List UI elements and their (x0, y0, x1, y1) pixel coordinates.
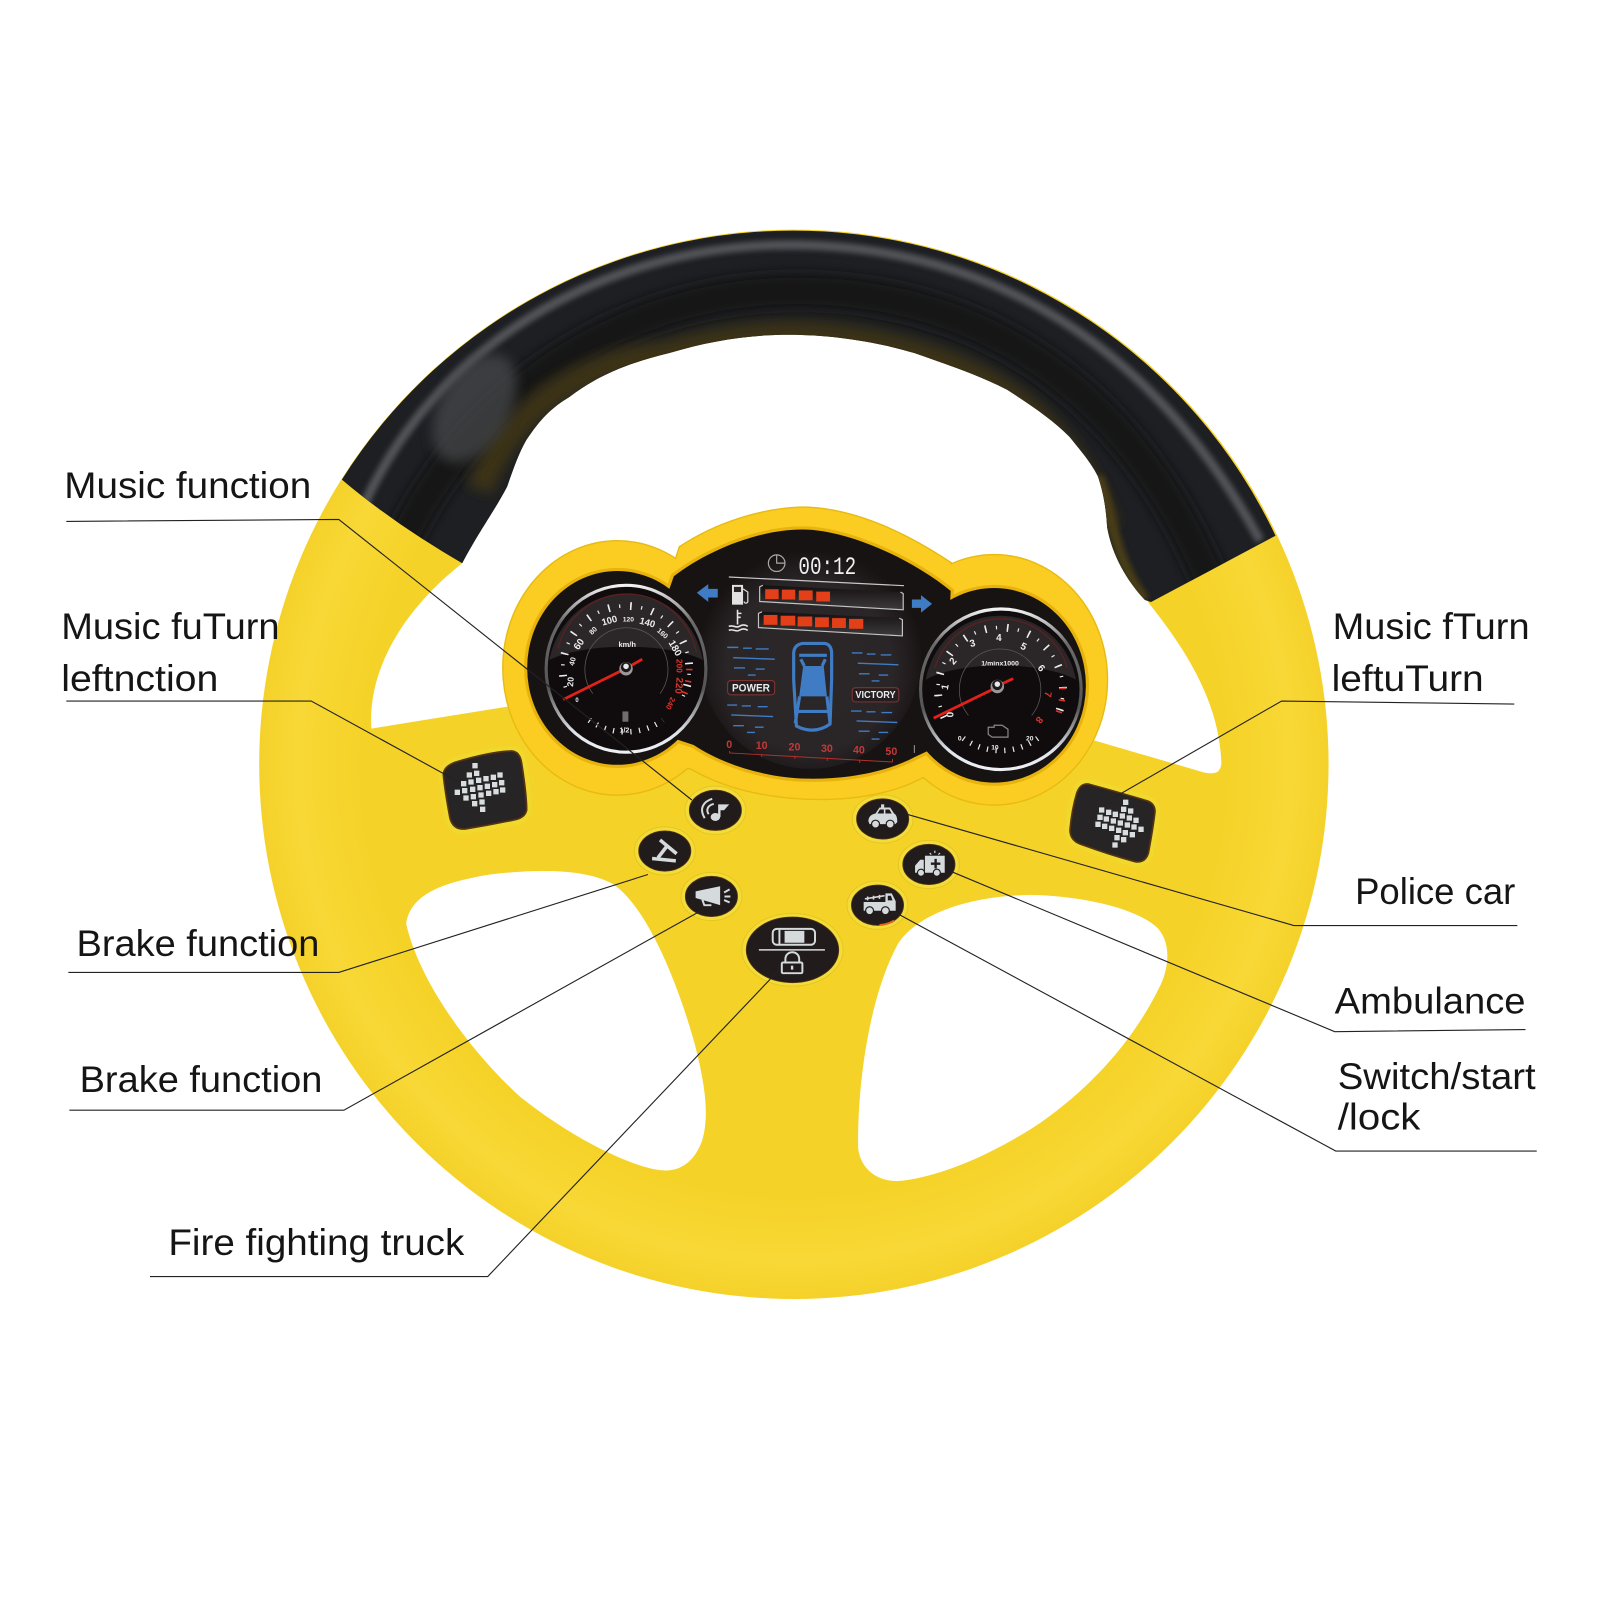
callout: Switch/start /lock: Switch/start (1338, 1056, 1536, 1097)
callout: Fire fighting truck: Fire fighting truck (168, 1222, 465, 1263)
blue car (794, 643, 832, 730)
left gauge numbers (565, 614, 685, 734)
left gauge numbers: 120 (623, 616, 634, 623)
right gauge numbers: 5 (1019, 641, 1029, 654)
divider (729, 577, 904, 586)
right gauge needle (934, 679, 1013, 718)
left speed lines (727, 647, 775, 732)
left gauge hub (619, 662, 633, 675)
grip base (342, 230, 1276, 602)
callout: Music function: Music function (64, 465, 311, 506)
left gauge numbers: 40 (567, 656, 578, 667)
left gauge numbers: 200 (675, 659, 685, 673)
POWER badge: POWER (732, 682, 770, 694)
left gauge numbers: 0 (575, 698, 579, 704)
callout: Ambulance (951, 871, 1526, 1032)
callout: Brake function lower (69, 911, 700, 1110)
temperature icon (729, 610, 748, 631)
callout: Switch/start /lock (895, 912, 1537, 1151)
right gauge numbers: 6 (1035, 663, 1047, 675)
right gauge hub (991, 680, 1004, 693)
right gauge numbers: 7 (1041, 691, 1053, 698)
left gauge numbers: 1/2 (619, 726, 629, 734)
black top grip (342, 230, 1276, 602)
right gauge numbers: 20 (1026, 736, 1034, 743)
left arrow dots (455, 763, 505, 812)
music button (685, 786, 746, 834)
fire truck icon (864, 893, 896, 915)
left gauge red arc (558, 594, 696, 652)
fuel icon (732, 585, 748, 605)
left gauge ticks (563, 606, 689, 698)
right gauge ring (921, 609, 1081, 770)
fire truck button (847, 881, 908, 929)
horn icon (696, 886, 730, 905)
cluster inner lip (527, 530, 1086, 783)
left gauge numbers: 20 (565, 676, 576, 687)
callout: Music fuTurn leftnction: Music fuTurn (61, 606, 280, 647)
divider (759, 948, 825, 952)
left gauge numbers: 100 (601, 614, 619, 628)
orange button edge (879, 921, 894, 925)
left gauge inner arc (585, 628, 668, 694)
left turn arrow (697, 584, 718, 602)
wheel body (259, 230, 1329, 1299)
right gauge numbers (940, 633, 1053, 751)
right gauge numbers: 1 (940, 683, 952, 691)
right gauge numbers: 8 (1033, 714, 1045, 725)
temperature bar (758, 612, 902, 636)
right gauge numbers: 2 (947, 655, 960, 667)
left gauge numbers: 240 (664, 696, 677, 711)
centre screen (697, 543, 932, 769)
cluster frame shadow (503, 508, 1107, 804)
right gauge numbers: 10 (991, 744, 999, 751)
digital time: 00:12 (798, 555, 856, 582)
callout: Fire fighting truck (150, 970, 779, 1277)
steering wheel (259, 219, 1329, 1299)
callout: Music function (64, 465, 692, 800)
right gauge numbers: 3 (969, 638, 977, 650)
screen carbon background (700, 543, 921, 769)
left gauge numbers: 140 (638, 616, 656, 630)
callout: Police car (907, 814, 1517, 926)
ambulance icon (915, 851, 945, 876)
right gauge red arc (935, 619, 1067, 668)
grip dark core (378, 291, 1230, 633)
right gauge numbers: 1/minx1000 (981, 661, 1019, 668)
callout: Brake function upper: Brake function (77, 923, 319, 964)
left turn button (443, 751, 527, 829)
brake pedal icon (652, 840, 677, 861)
police car icon (868, 804, 897, 828)
music icon (702, 799, 729, 821)
grip brown inner band (480, 335, 1107, 528)
ambulance button (898, 840, 959, 889)
right arrow dots (1095, 800, 1144, 848)
callout: Music fuTurn leftnction (61, 606, 458, 782)
hub and controls (503, 508, 1107, 986)
right gauge ticks (938, 627, 1063, 717)
left gauge fuel icon (622, 711, 628, 722)
clock icon (768, 555, 785, 571)
right gauge numbers: 0 (958, 736, 962, 743)
callout: Police car: Police car (1355, 871, 1515, 912)
cluster dark surround (527, 530, 1086, 783)
speed scale: 30 (821, 743, 833, 755)
brake pedal button (634, 827, 695, 875)
speed scale: 0 (726, 739, 732, 751)
left gauge numbers: km/h (618, 640, 636, 649)
cluster yellow frame (503, 508, 1107, 804)
VICTORY badge: VICTORY (855, 690, 896, 701)
callout: Switch/start /lock: /lock (1338, 1097, 1421, 1138)
speed scale: 20 (789, 742, 800, 754)
callout: Brake function upper (68, 874, 648, 972)
left gauge numbers: 60 (572, 637, 587, 652)
infographic: steering wheel diagram (64, 230, 1537, 1299)
car top view icon (773, 929, 815, 945)
right turn arrow (912, 595, 932, 613)
grip grey patch left (430, 352, 520, 466)
right gauge inner arc (959, 649, 1041, 715)
padlock icon (782, 952, 802, 973)
left gauge ring (546, 585, 706, 752)
speed scale: 40 (853, 744, 865, 756)
left gauge numbers: 160 (655, 627, 669, 641)
callout: Music fTurn leftuTurn (1113, 606, 1530, 798)
speed scale: 50 (885, 746, 897, 758)
callout: Music fTurn leftuTurn: Music fTurn (1333, 606, 1530, 647)
callout: Music fuTurn leftnction: leftnction (61, 658, 218, 699)
right speed lines (851, 653, 898, 739)
police car button (852, 795, 913, 843)
callout: Ambulance: Ambulance (1335, 980, 1526, 1021)
horn button (681, 872, 742, 921)
callout: Music fTurn leftuTurn: leftuTurn (1332, 658, 1484, 699)
left gauge needle (563, 659, 642, 700)
grip light outer band (357, 245, 1260, 541)
right gauge numbers: 4 (996, 633, 1002, 644)
left gauge face highlight (549, 594, 703, 660)
right gauge (921, 609, 1081, 770)
left gauge numbers: 180 (666, 639, 684, 659)
lock start button (742, 913, 843, 986)
callout: Brake function lower: Brake function (80, 1059, 322, 1100)
right gauge engine icon (988, 725, 1008, 737)
right gauge face highlight (926, 616, 1076, 680)
right turn button (1070, 784, 1155, 862)
left gauge numbers: 220 (672, 677, 685, 695)
grip right inner shade (1098, 477, 1145, 600)
right gauge numbers: 0 (945, 711, 956, 717)
fuel bar (760, 585, 903, 610)
speed scale: 10 (756, 740, 768, 752)
left gauge (546, 585, 706, 752)
speed scale (726, 739, 914, 763)
left gauge numbers: 80 (588, 625, 599, 637)
